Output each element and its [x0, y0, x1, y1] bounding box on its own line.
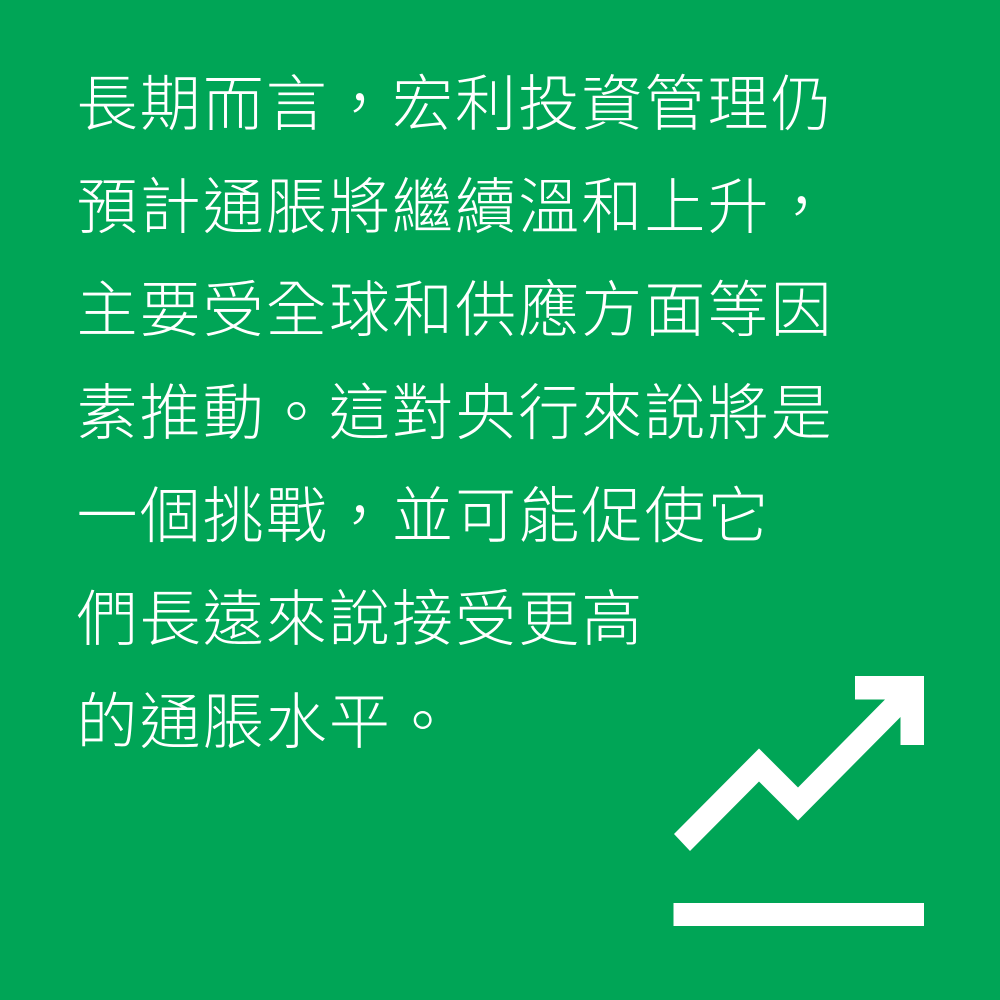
body text: 們長遠來說接受更高: [76, 585, 644, 653]
text: 的通脹水平。: [76, 688, 455, 756]
body text: 長期而言，宏利投資管理仍: [76, 70, 834, 138]
body text: 主要受全球和供應方面等因: [76, 276, 834, 344]
body text: 一個挑戰，並可能促使它: [76, 482, 771, 550]
body text: 預計通脹將繼續溫和上升，: [76, 173, 834, 241]
body text: [76, 70, 834, 756]
body text: 素推動。這對央行來說將是: [76, 379, 834, 447]
